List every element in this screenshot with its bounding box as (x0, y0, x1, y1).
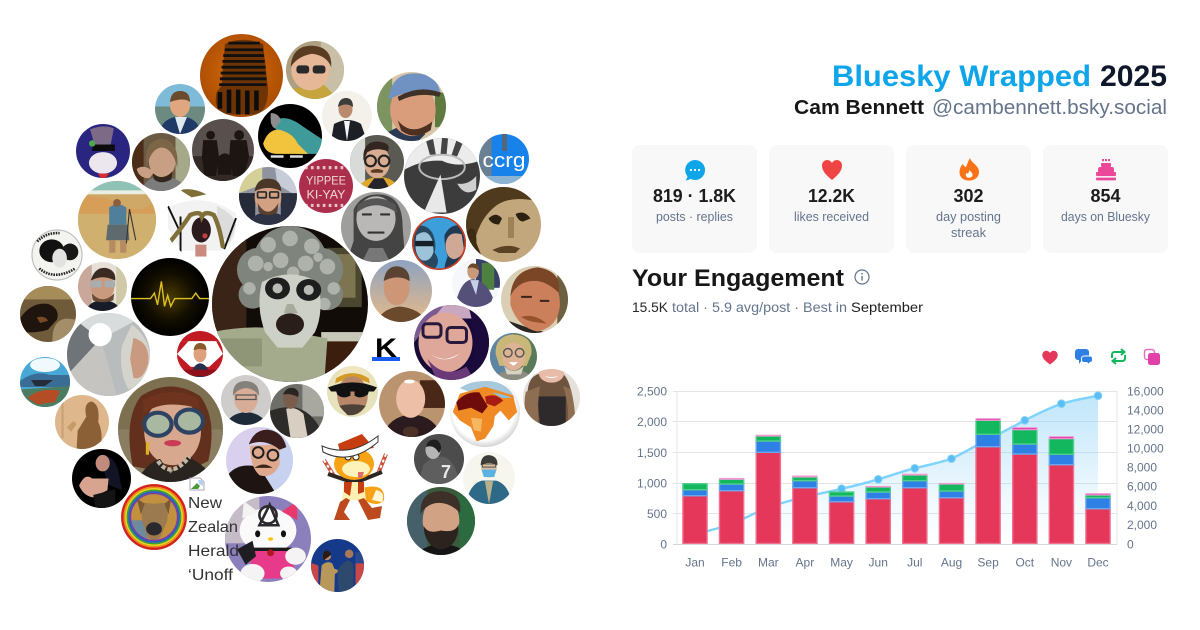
right axis labels: 2,000 (1127, 518, 1157, 532)
month labels: Aug (941, 556, 962, 570)
heading: your engagement: Your Engagement (632, 265, 844, 292)
engagement summary: total · 5.9 avg/post · Best in (672, 299, 847, 315)
avatar: Yippee Ki-Yay: KI-YAY (307, 187, 346, 201)
month labels: Dec (1087, 556, 1109, 570)
avatar: older man with glasses (221, 375, 271, 425)
avatar: man with cap (377, 72, 446, 141)
right axis labels: 16,000 (1127, 384, 1164, 398)
title: Bluesky Wrapped (832, 60, 1091, 93)
right axis labels: 8,000 (1127, 460, 1157, 474)
right axis labels: 4,000 (1127, 499, 1157, 513)
left axis labels (637, 384, 667, 552)
avatar: illustrated man with blue mask (463, 452, 515, 504)
avatar: two faces, blue (412, 216, 466, 270)
avatar: woman with large blue glasses (118, 377, 223, 482)
avatar: Yippee Ki-Yay (299, 159, 353, 213)
avatar: dog in rainbow ring (121, 484, 187, 550)
panel: day posting streak: day posting (936, 210, 1001, 224)
avatar: dachshund (20, 286, 76, 342)
avatar: man with mirrored sunglasses (78, 262, 127, 311)
avatar: silhouetted soldiers (192, 119, 254, 181)
month labels: Jul (907, 556, 922, 570)
month labels (685, 556, 1109, 570)
title: 2025 (1100, 60, 1167, 93)
engagement summary: 15.5K (632, 299, 669, 315)
bar: Jul (903, 474, 927, 544)
avatar: man with helmet and dark sunglasses (327, 366, 378, 417)
icon: quotes (1144, 350, 1160, 365)
avatar: ccrg logo: ccrg (482, 150, 526, 172)
avatar: man on plane with glasses (239, 167, 297, 225)
panel: likes received: 12.2K (808, 186, 855, 206)
month labels: Apr (796, 556, 814, 570)
avatar: bald man smiling (379, 371, 445, 437)
avatar: silhouette shadow on beige (55, 395, 109, 449)
left axis labels: 0 (660, 538, 667, 552)
bar: Jan (683, 484, 707, 544)
bar: Dec (1086, 494, 1110, 544)
avatar: smiling man purple tint (414, 305, 489, 380)
grid lines (673, 391, 1117, 544)
avatar: man in coat (270, 384, 324, 438)
right axis labels: 10,000 (1127, 442, 1164, 456)
avatar: microphone (200, 34, 283, 117)
avatar: man against sunset sky (370, 260, 432, 322)
avatar: K logo: K (375, 333, 398, 363)
user name and handle (794, 97, 1167, 119)
panel: likes received (769, 145, 894, 253)
panel: posts and replies: posts · replies (656, 210, 733, 224)
baseline (673, 544, 1117, 546)
user name and handle: Cam Bennett (794, 97, 924, 119)
bar: May (830, 492, 854, 544)
left axis labels: 1,000 (637, 476, 667, 490)
panel: days on Bluesky: 854 (1090, 186, 1120, 206)
broken image with alt text: Zealan (188, 519, 238, 536)
panel: posts and replies (632, 145, 757, 253)
broken image with alt text: Herald (188, 543, 239, 560)
right axis labels (1127, 384, 1164, 552)
month labels: Feb (721, 556, 742, 570)
bar: Feb (720, 478, 744, 544)
right axis labels: 0 (1127, 538, 1134, 552)
avatar: red-haired man (501, 266, 568, 333)
avatar: long-haired man (132, 133, 190, 191)
panel: day posting streak: streak (951, 226, 987, 240)
avatar: ccrg logo (479, 134, 529, 184)
panel: days on Bluesky: days on Bluesky (1061, 210, 1151, 224)
avatar: man with glasses and yellow shirt (286, 41, 344, 99)
cumulative line (695, 392, 1102, 535)
panel: day posting streak: 302 (954, 186, 984, 206)
avatar: Yippee Ki-Yay: YIPPEE (306, 173, 346, 187)
broken image with alt text (188, 477, 240, 583)
avatar: speaker in suit (452, 259, 500, 307)
bar: Jun (866, 486, 890, 544)
avatar: black and white abstract (404, 138, 480, 214)
left axis labels: 500 (647, 507, 667, 521)
avatar: man in dark suit (322, 91, 372, 141)
icon: info (855, 270, 869, 284)
right axis labels: 14,000 (1127, 404, 1164, 418)
right axis labels: 6,000 (1127, 480, 1157, 494)
bar: Sep (976, 419, 1000, 544)
avatar: election red graphic (177, 331, 223, 377)
stacked bars (683, 419, 1110, 544)
icon: likes heart (1042, 351, 1058, 364)
left axis labels: 2,500 (637, 384, 667, 398)
panel: day posting streak (906, 145, 1031, 253)
month labels: Sep (977, 556, 999, 570)
panel: days on Bluesky (1043, 145, 1168, 253)
avatar: ghost with moustache (168, 189, 237, 256)
avatar: man with glasses and moustache (350, 135, 404, 189)
avatar: man in blue suit, blue sky (155, 84, 205, 134)
avatar: footballer number 7: 7 (441, 462, 451, 482)
avatar: BW engraved portrait (341, 192, 411, 262)
avatar cluster (20, 34, 580, 592)
avatar: K logo (372, 333, 400, 363)
icon: chat bubble (685, 160, 705, 180)
avatar: fox cowboy mascot (320, 430, 390, 524)
avatar: man with cap and glasses, lilac background (226, 427, 293, 494)
left axis labels: 2,000 (637, 415, 667, 429)
panel: likes received: likes received (794, 210, 869, 224)
month labels: Mar (758, 556, 779, 570)
month labels: Jun (869, 556, 888, 570)
avatar: two figures shaking hands with flags (311, 539, 364, 592)
avatar: Hello Kitty plush (225, 496, 311, 582)
icon: replies (1075, 349, 1092, 364)
bar: Nov (1049, 437, 1074, 544)
avatar: globe heat map (450, 381, 520, 447)
month labels: Oct (1015, 556, 1035, 570)
avatar: lake with bird (20, 357, 70, 407)
avatar: parrot on black (258, 104, 322, 168)
chart: monthly engagement (637, 384, 1164, 570)
avatar: man in kilt in wheat field (78, 181, 156, 259)
month labels: Nov (1051, 556, 1072, 570)
month labels: Jan (685, 556, 705, 570)
avatar: woman long hair smiling (523, 369, 580, 426)
avatar: yellow heartbeat on black (131, 258, 209, 336)
broken image with alt text: New (188, 495, 222, 512)
avatar: pixel art woman on black (72, 449, 131, 508)
icon: heart (822, 160, 842, 180)
legend icons (1042, 349, 1160, 365)
avatar: curly grey-haired man (490, 333, 537, 380)
user name and handle: @cambennett.bsky.social (932, 97, 1167, 119)
bar: Mar (756, 435, 780, 544)
bar: Apr (793, 476, 817, 544)
engagement summary: September (851, 299, 923, 315)
avatar: zombie with wild white hair (largest) (212, 226, 368, 382)
avatar: tunnel fisheye (67, 313, 150, 396)
icon: flame (960, 158, 979, 180)
avatar: bearded man (407, 487, 475, 555)
avatar: badge with portrait (31, 229, 83, 281)
avatar: footballer number 7 (414, 434, 464, 484)
bar: Oct (1013, 428, 1037, 544)
month labels: May (830, 556, 853, 570)
avatar: cartoon rabbit with top hat (76, 124, 130, 178)
right axis labels: 12,000 (1127, 422, 1164, 436)
panel: posts and replies: 819 · 1.8K (653, 186, 736, 206)
icon: reposts (1112, 349, 1125, 364)
icon: birthday cake (1096, 159, 1116, 180)
avatar: sepia portrait (466, 187, 541, 262)
engagement summary (632, 299, 923, 315)
left axis labels: 1,500 (637, 446, 667, 460)
bar: Aug (939, 483, 964, 544)
